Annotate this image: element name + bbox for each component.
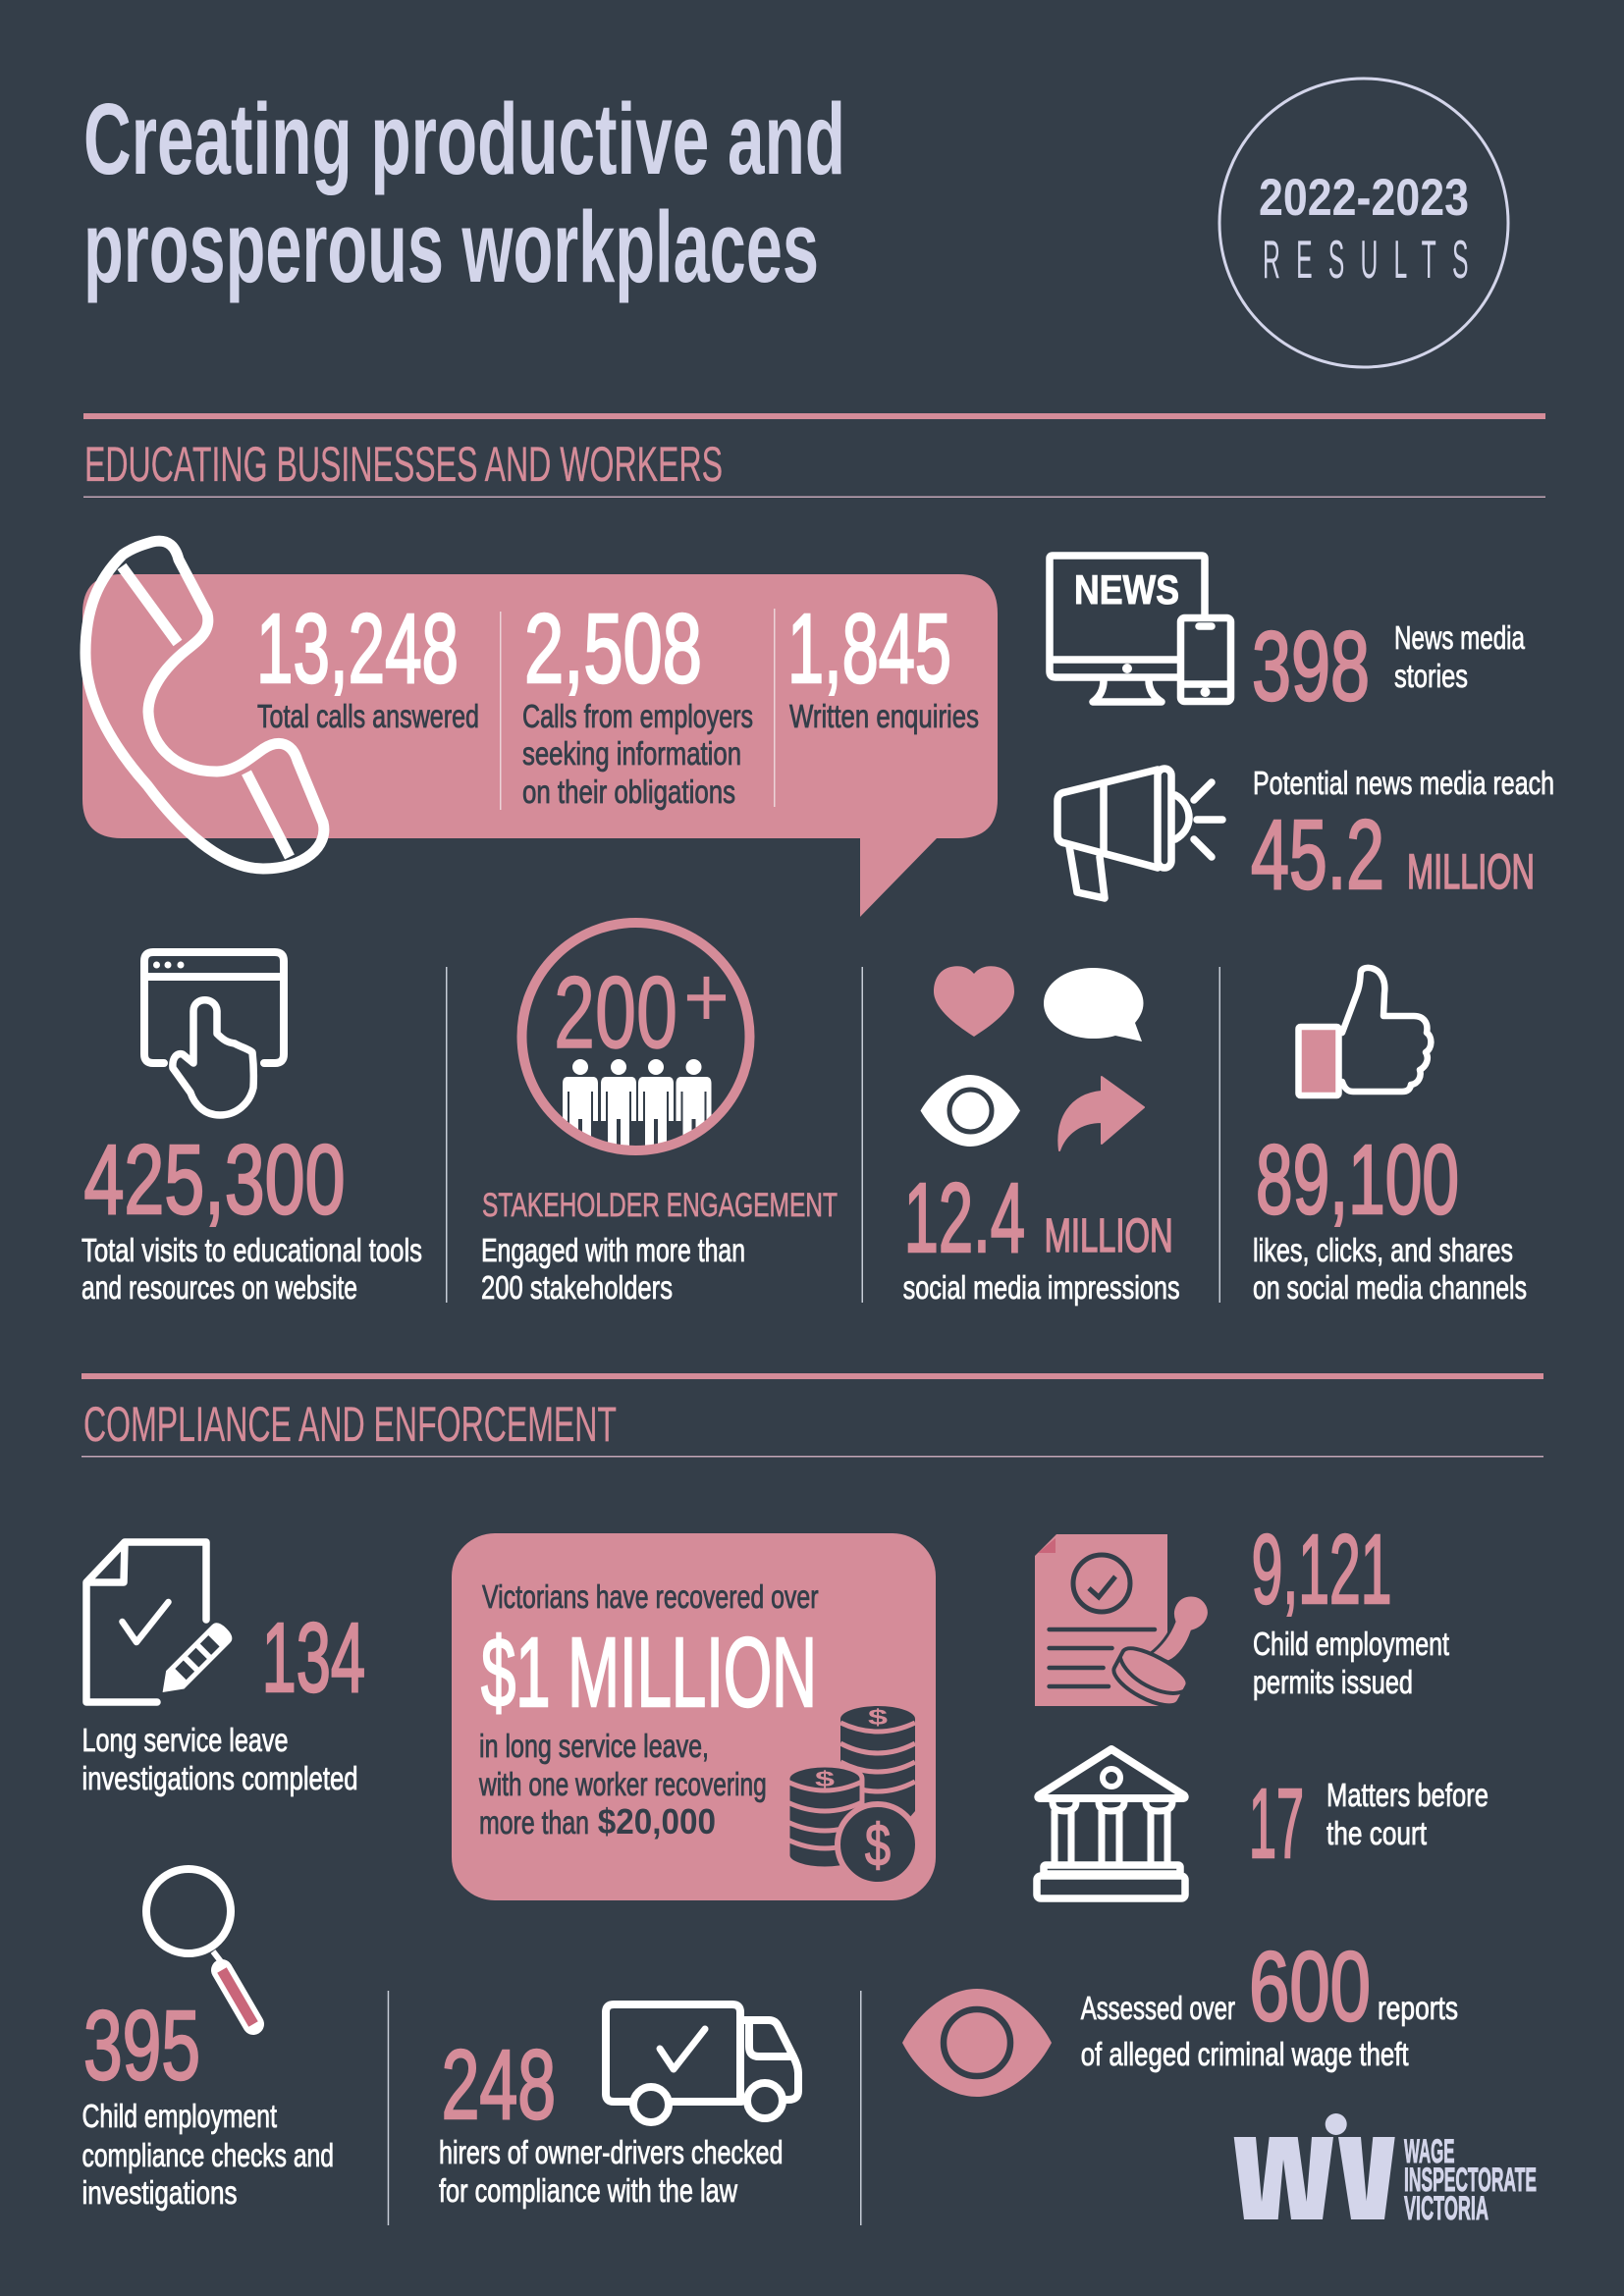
- icon: permit document and stamp: [1035, 1534, 1209, 1714]
- stat: 134 long service leave investigations: 134: [262, 1603, 365, 1713]
- stat: total calls answered: 13,248: [256, 594, 459, 704]
- icon: stacks of coins: [787, 1705, 918, 1885]
- icon: news on monitor and phone: [1050, 556, 1231, 702]
- panel: $1 million recovered: more than: [479, 1804, 589, 1841]
- stat: 425,300 website visits: 425,300: [84, 1125, 346, 1235]
- stat: 395 child employment checks: [82, 1991, 334, 2211]
- stat: stakeholder engagement: [481, 1187, 838, 1306]
- stat: assessed over 600 reports: Assessed over: [1081, 1990, 1235, 2026]
- title: prosperous workplaces: [83, 190, 819, 303]
- badge: 2022-2023 results: [1219, 79, 1508, 367]
- stat: 89,100 likes, clicks and shares: likes, clicks, and shares: [1253, 1232, 1513, 1268]
- icon: heart: [934, 966, 1014, 1037]
- badge: 2022-2023 results: RESULTS: [1263, 230, 1485, 291]
- stat: assessed over 600 reports: [1081, 1932, 1458, 2072]
- stat: 395 child employment checks: compliance checks and: [82, 2137, 334, 2173]
- icon: comment bubble: [1044, 968, 1143, 1041]
- stat: 12.4 million impressions: social media impressions: [903, 1269, 1180, 1306]
- stat: potential news media reach: 45.2: [1251, 800, 1384, 910]
- stat: 398 news media stories: News media: [1394, 619, 1525, 656]
- icon: eye: [902, 1989, 1052, 2097]
- stat: 134 long service leave investigations: Long service leave: [82, 1722, 289, 1758]
- icon: thumbs up: [1298, 968, 1431, 1095]
- stat: written enquiries: [787, 594, 979, 734]
- stat: assessed over 600 reports: of alleged criminal wage theft: [1081, 2036, 1409, 2072]
- stat: 9,121 child employment permits: 9,121: [1252, 1515, 1392, 1625]
- logo: Wage Inspectorate Victoria: [1234, 2113, 1537, 2227]
- stat: 248 hirers of owner-drivers: for compliance with the law: [439, 2172, 737, 2209]
- panel: speech bubble with call statistics: [82, 541, 998, 917]
- icon: stacks of coins: $: [815, 1767, 835, 1791]
- icon: news on monitor and phone: NEWS: [1074, 566, 1179, 613]
- stat: 425,300 website visits: and resources on website: [81, 1269, 357, 1306]
- stat: 12.4 million impressions: MILLION: [1045, 1210, 1173, 1262]
- icon: delivery truck with tick: [606, 2004, 798, 2122]
- stat: total calls answered: Total calls answered: [257, 698, 479, 734]
- stat: 134 long service leave investigations: investigations completed: [82, 1760, 357, 1796]
- stat: 9,121 child employment permits: permits issued: [1253, 1664, 1413, 1700]
- stat: calls from employers: [522, 594, 753, 810]
- stat: 398 news media stories: 398: [1252, 612, 1370, 721]
- panel: $1 million recovered: $20,000: [598, 1801, 716, 1842]
- stat: 398 news media stories: [1252, 612, 1525, 721]
- stat: 134 long service leave investigations: [82, 1603, 365, 1796]
- stat: total calls answered: [256, 594, 479, 734]
- icon: stacks of coins: $: [865, 1812, 891, 1878]
- stat: 398 news media stories: stories: [1394, 658, 1468, 694]
- stat: calls from employers: seeking information: [522, 735, 741, 772]
- stat: 425,300 website visits: Total visits to educational tools: [81, 1232, 422, 1268]
- icon: stacks of coins: $: [868, 1705, 888, 1730]
- panel: $1 million recovered: in long service leave,: [479, 1728, 709, 1764]
- stat: stakeholder engagement: STAKEHOLDER ENGAGEMENT: [482, 1187, 838, 1224]
- stat: 12.4 million impressions: 12.4: [904, 1163, 1025, 1273]
- stat: 395 child employment checks: investigations: [82, 2174, 238, 2211]
- stat: stakeholder engagement: Engaged with more than: [481, 1232, 745, 1268]
- icons: social media reactions: [921, 966, 1144, 1150]
- icon: court building: [1037, 1749, 1185, 1898]
- stat: 9,121 child employment permits: [1252, 1515, 1449, 1700]
- stat: 17 matters before the court: 17: [1249, 1769, 1304, 1879]
- icon: 200+ stakeholders circle: 200: [554, 956, 677, 1070]
- icon: 200+ stakeholders circle: +: [683, 948, 730, 1045]
- stat: 89,100 likes, clicks and shares: on social media channels: [1253, 1269, 1527, 1306]
- icon: 200+ stakeholders circle: [522, 923, 750, 1153]
- stat: calls from employers: Calls from employers: [522, 698, 753, 734]
- stat: calls from employers: on their obligations: [522, 774, 735, 810]
- stat: stakeholder engagement: 200 stakeholders: [481, 1269, 673, 1306]
- stat: 425,300 website visits: [81, 1125, 422, 1306]
- icon: magnifying glass: [146, 1869, 253, 2024]
- icon: browser with pointing hand: [144, 952, 284, 1115]
- icon: eye: [921, 1075, 1020, 1147]
- heading: compliance and enforcement: COMPLIANCE AND ENFORCEMENT: [83, 1397, 617, 1452]
- stat: 9,121 child employment permits: Child employment: [1253, 1626, 1449, 1662]
- panel: $1 million recovered: $1 MILLION: [481, 1618, 817, 1728]
- stat: calls from employers: 2,508: [524, 594, 702, 704]
- stat: assessed over 600 reports: 600: [1249, 1932, 1371, 2042]
- badge: 2022-2023 results: 2022-2023: [1259, 169, 1469, 227]
- stat: 17 matters before the court: Matters before: [1326, 1777, 1489, 1813]
- logo: Wage Inspectorate Victoria: VICTORIA: [1404, 2190, 1489, 2227]
- panel: $1 million recovered: Victorians have recovered over: [482, 1578, 819, 1615]
- stat: 89,100 likes, clicks and shares: [1253, 1125, 1527, 1306]
- stat: 248 hirers of owner-drivers: [439, 2030, 784, 2209]
- icon: document with tick and pencil: [86, 1542, 236, 1702]
- logo: Wage Inspectorate Victoria: WAGE: [1404, 2133, 1455, 2170]
- stat: 89,100 likes, clicks and shares: 89,100: [1256, 1125, 1459, 1235]
- stat: 248 hirers of owner-drivers: hirers of owner-drivers checked: [439, 2134, 784, 2170]
- stat: 395 child employment checks: 395: [83, 1991, 200, 2101]
- heading: educating businesses and workers: EDUCATING BUSINESSES AND WORKERS: [84, 437, 723, 492]
- panel: $1 million recovered: [452, 1533, 936, 1900]
- title: Creating productive and: [83, 82, 845, 195]
- icon: megaphone: [1057, 769, 1222, 898]
- stat: assessed over 600 reports: reports: [1378, 1990, 1458, 2026]
- stat: written enquiries: Written enquiries: [789, 698, 979, 734]
- stat: written enquiries: 1,845: [787, 594, 951, 704]
- panel: $1 million recovered: with one worker recovering: [478, 1766, 767, 1802]
- stat: 17 matters before the court: the court: [1326, 1815, 1427, 1851]
- stat: 17 matters before the court: [1249, 1769, 1489, 1879]
- icon: share arrow: [1058, 1077, 1144, 1150]
- stat: 395 child employment checks: Child employment: [82, 2098, 277, 2134]
- stat: 248 hirers of owner-drivers: 248: [442, 2030, 556, 2140]
- stat: potential news media reach: [1251, 765, 1554, 910]
- stat: potential news media reach: MILLION: [1407, 844, 1535, 899]
- title: [83, 82, 845, 303]
- icon: telephone handset: [85, 541, 324, 869]
- stat: 12.4 million impressions: [903, 1163, 1180, 1306]
